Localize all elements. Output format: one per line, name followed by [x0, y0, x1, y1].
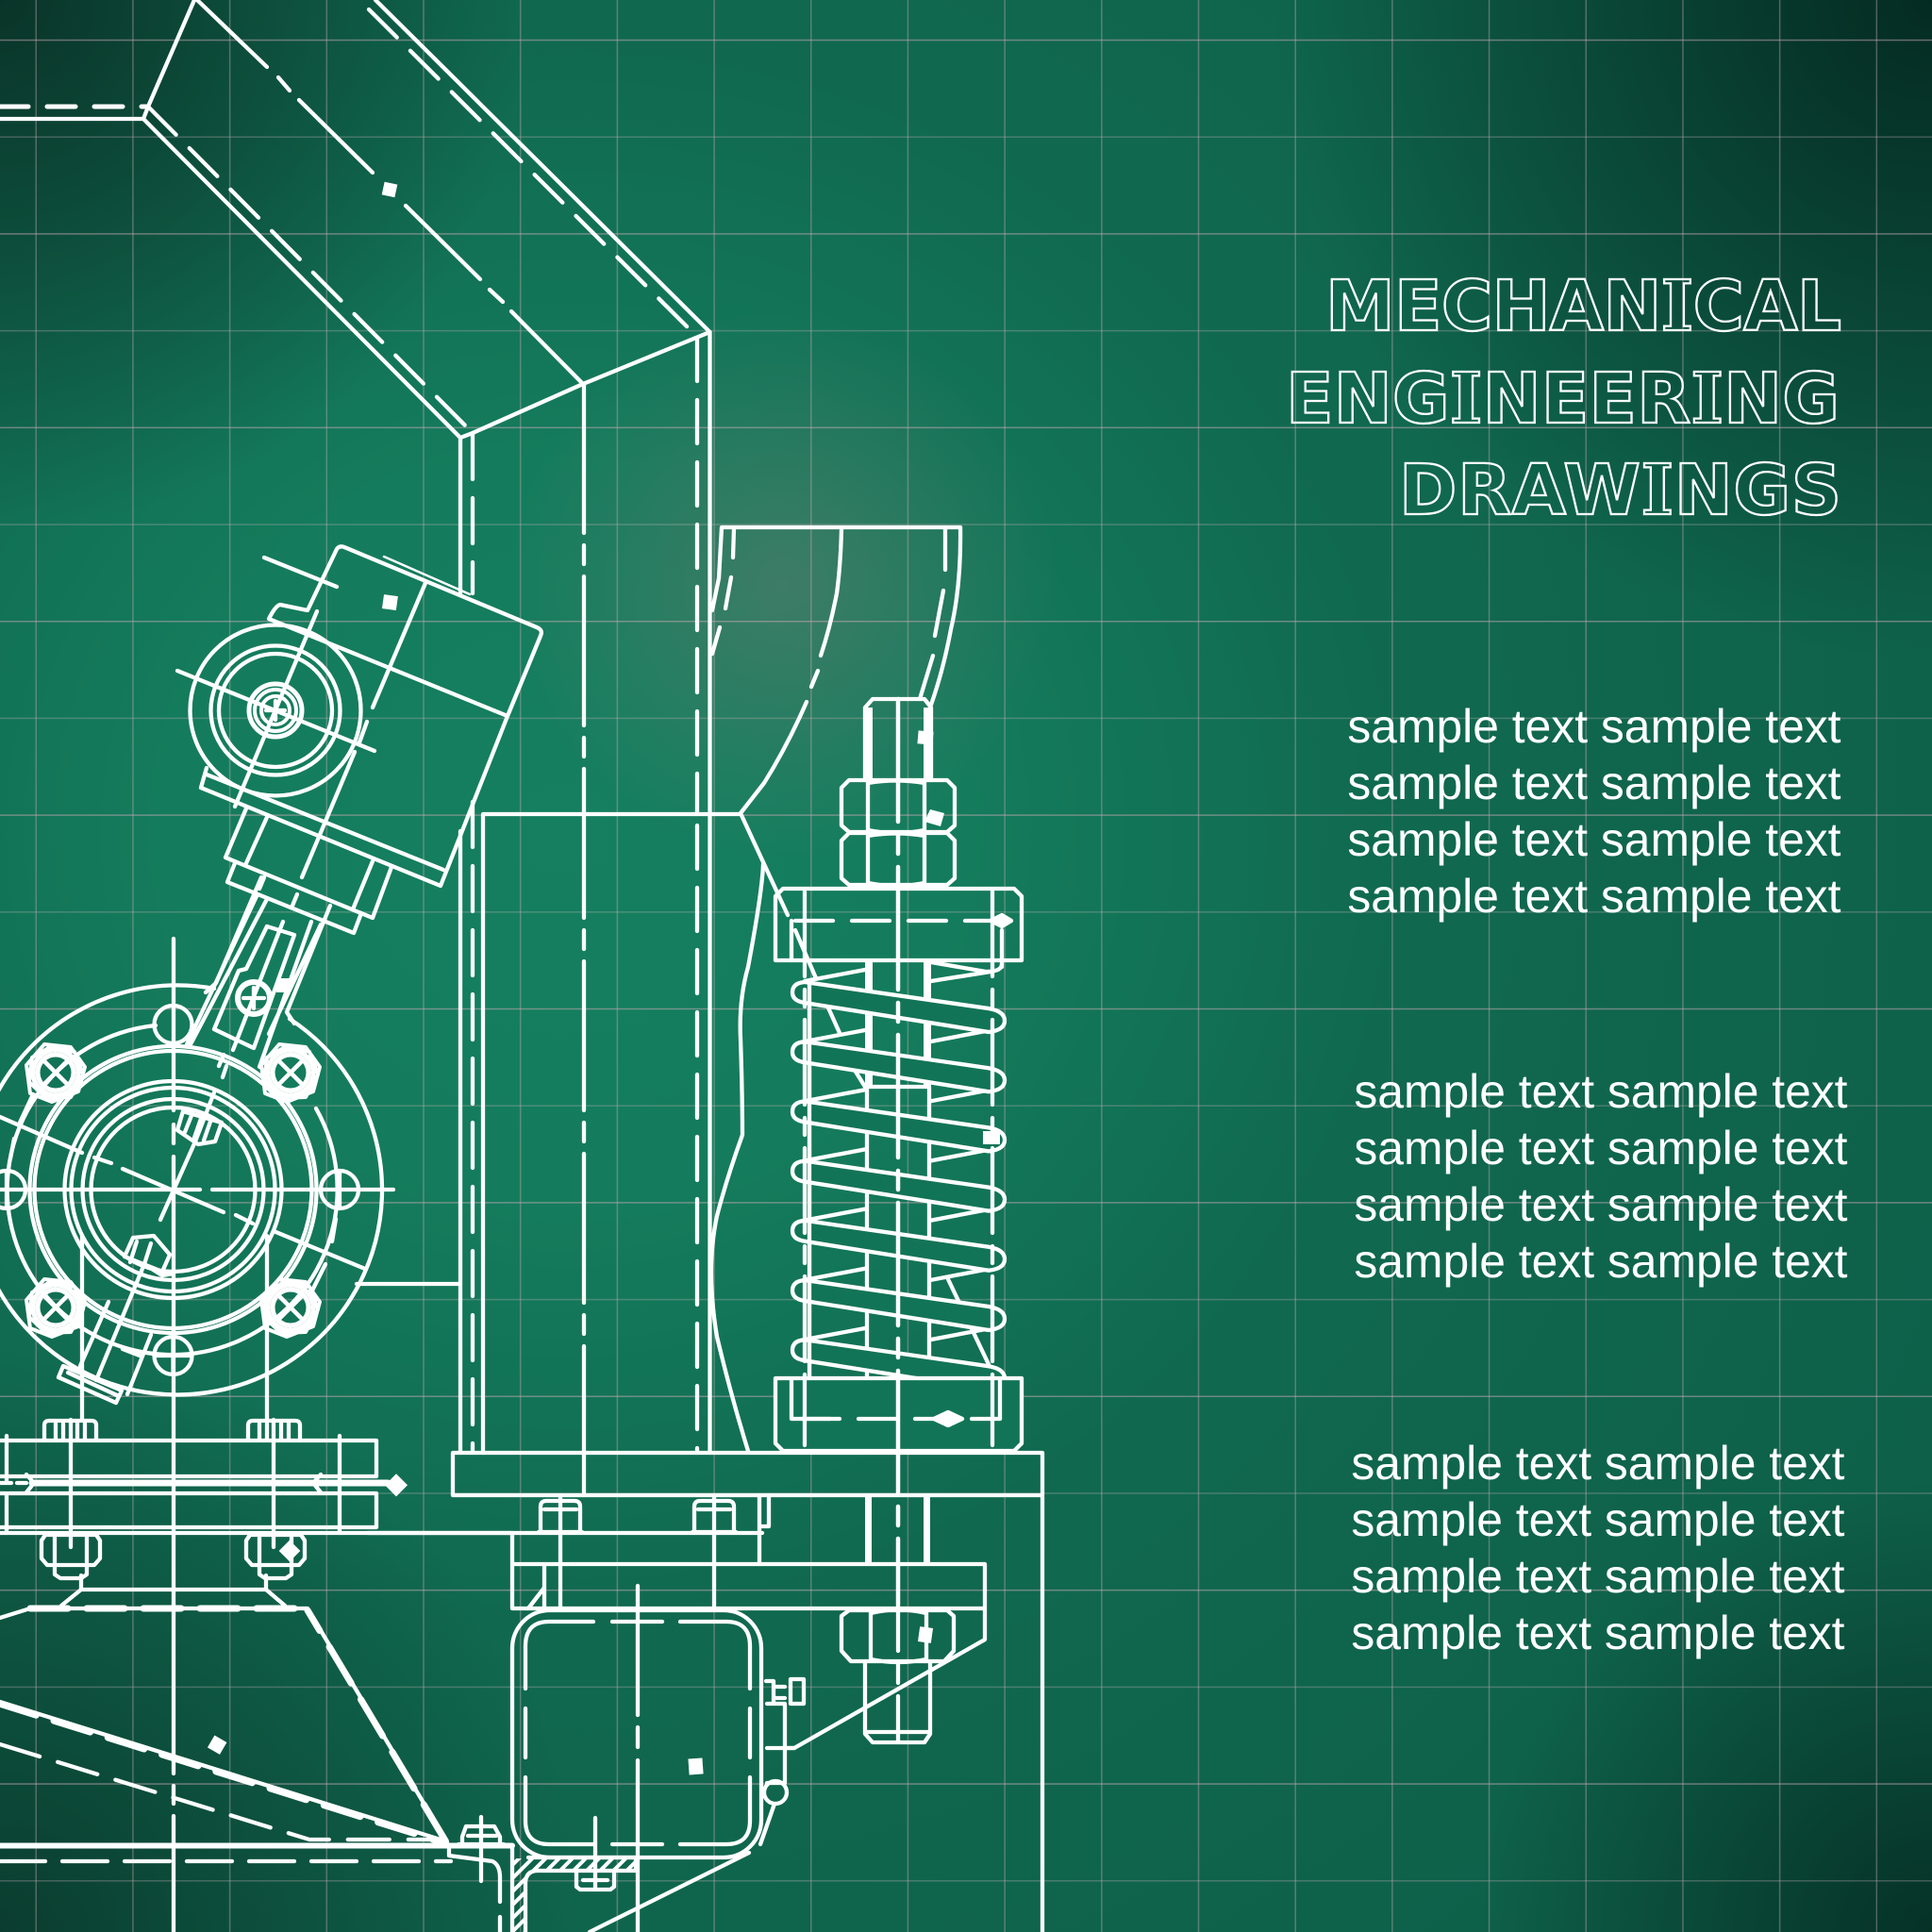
hatched angle section [512, 1845, 636, 1932]
lower stud and nut [841, 1495, 954, 1742]
text block 3: sample text sample text [1351, 1437, 1845, 1490]
text block 1: sample text sample text [1347, 870, 1841, 923]
elbow duct [143, 0, 709, 438]
flange bolts [26, 1044, 320, 1337]
tube side clamp [590, 1679, 804, 1932]
text block 1 [1347, 700, 1841, 923]
small bolt on frame [458, 1817, 504, 1881]
text block 3: sample text sample text [1351, 1493, 1845, 1546]
text block 2 [1354, 1065, 1848, 1288]
connecting shaft [187, 877, 330, 1067]
text block 2: sample text sample text [1354, 1235, 1848, 1288]
title line 1: MECHANICAL [1325, 266, 1841, 347]
text block 3: sample text sample text [1351, 1607, 1845, 1659]
lower bracket [368, 1495, 985, 1748]
round flange [0, 985, 382, 1394]
text block 1: sample text sample text [1347, 700, 1841, 753]
diamond mark on duct [382, 182, 397, 197]
motor mount blocks [225, 808, 391, 933]
text block 2: sample text sample text [1354, 1122, 1848, 1174]
text block 2: sample text sample text [1354, 1065, 1848, 1118]
square tube [512, 1586, 761, 1932]
vertical column [357, 332, 741, 1495]
clamp nuts bottom [42, 1535, 305, 1606]
text block 1: sample text sample text [1347, 813, 1841, 866]
flange bolt holes [0, 1006, 358, 1374]
hopper body [0, 1608, 448, 1845]
title line 2: ENGINEERING [1286, 358, 1840, 440]
spring centre line [896, 699, 900, 1604]
title line 3: DRAWINGS [1399, 450, 1841, 531]
technical drawing [0, 0, 1042, 1932]
clamp plates [0, 1420, 512, 1547]
base plate [453, 1453, 1042, 1932]
lower spring plate [775, 1378, 1022, 1451]
motor housing [177, 546, 541, 886]
flange lower arm [58, 1302, 151, 1403]
funnel top [711, 527, 960, 1451]
upper spring plate [775, 889, 1022, 1087]
text block 1: sample text sample text [1347, 757, 1841, 809]
text block 3 [1351, 1437, 1845, 1659]
motor shaft bearing [191, 625, 360, 796]
title: mechanical engineering drawings [1286, 266, 1841, 531]
flange set screws [125, 1111, 222, 1275]
coil spring [792, 891, 1005, 1443]
hopper frame [0, 1604, 512, 1932]
text block 2: sample text sample text [1354, 1178, 1848, 1231]
spring bolt [865, 960, 1014, 1451]
upper stud and nuts [841, 699, 955, 886]
text block 3: sample text sample text [1351, 1550, 1845, 1603]
flange centre lines [0, 939, 393, 1604]
clamp nuts top [44, 1421, 300, 1440]
inlet pipe at top left [0, 0, 194, 119]
